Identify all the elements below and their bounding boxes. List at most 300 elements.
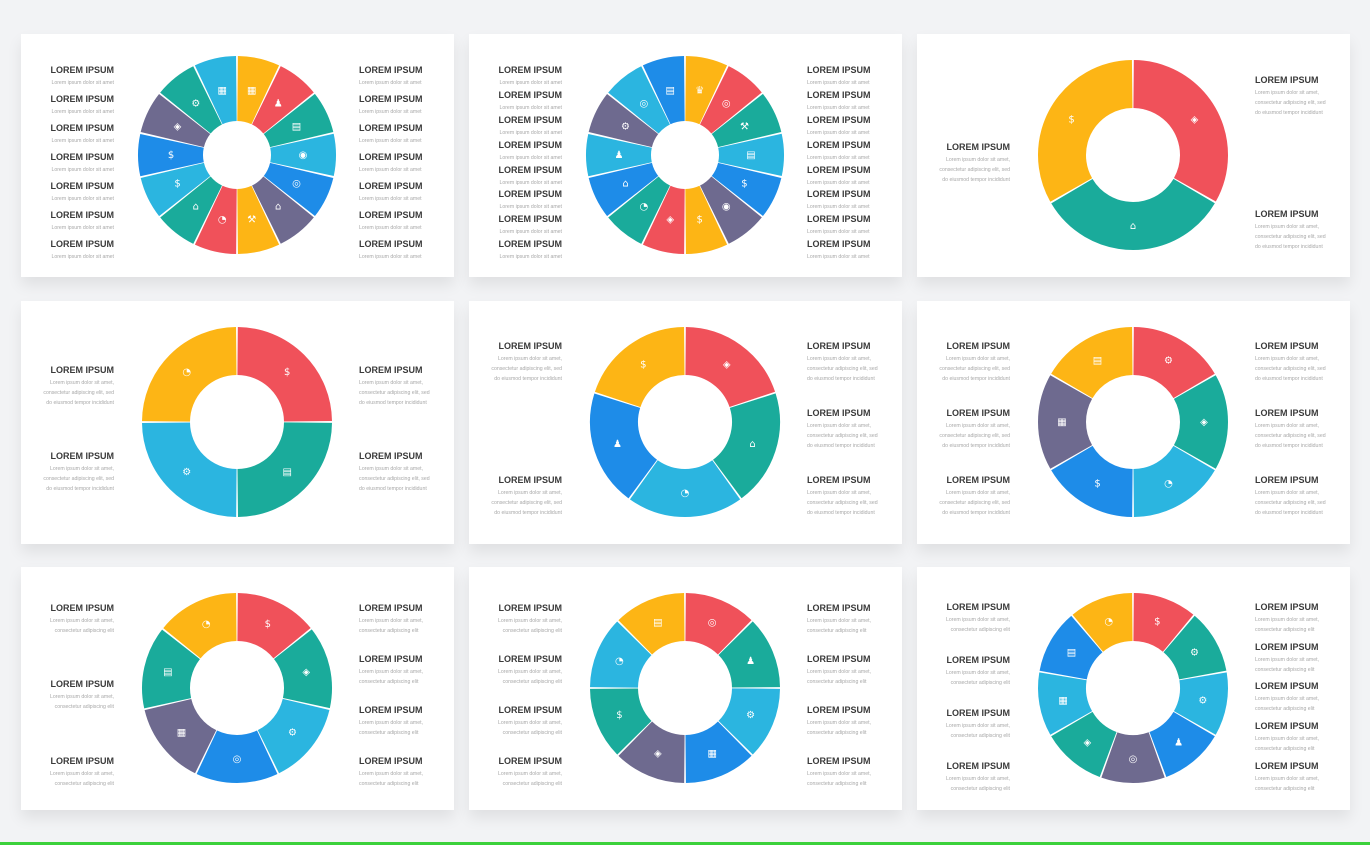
donut chart 5: ◔ [681,488,689,499]
right labels [359,365,430,406]
slide 1: 14-segment pinwheel: Lorem ipsum dolor sit amet [51,109,114,115]
slide 2: 14-segment pinwheel variant: Lorem ipsum dolor sit amet [499,130,562,136]
slide 2: 14-segment pinwheel variant: LOREM IPSUM [498,239,562,249]
right labels [1255,602,1319,633]
right labels: consectetur adipiscing elit [1255,627,1314,633]
left label: Lorem ipsum dolor sit amet, [946,157,1010,163]
donut chart 7: ◎ [233,754,241,765]
left labels: do eiusmod tempor incididunt [494,376,562,382]
slide 6: 6 segments: consectetur adipiscing elit, sed [1255,433,1326,439]
slide 9: 9 segments: Lorem ipsum dolor sit amet, [946,776,1010,782]
donut chart 6: ▤ [1093,356,1102,367]
donut chart 5 [590,327,780,517]
slide 8: 8 segments: LOREM IPSUM [498,705,562,715]
slide 5: 5 segments: consectetur adipiscing elit, sed [491,500,562,506]
slide 2: 14-segment pinwheel variant: LOREM IPSUM [807,115,871,125]
slide 1: 14-segment pinwheel: LOREM IPSUM [50,210,114,220]
left labels [939,341,1010,382]
slide 8: 8 segments: LOREM IPSUM [498,756,562,766]
left labels: Lorem ipsum dolor sit amet, [498,618,562,624]
slide 1: 14-segment pinwheel: LOREM IPSUM [359,123,423,133]
slide 8: 8 segments: consectetur adipiscing elit [807,781,866,787]
slide 7: 7 segments: consectetur adipiscing elit [55,704,114,710]
donut chart 9 [1038,593,1228,783]
donut chart 9: ♟ [1174,737,1183,748]
right labels: do eiusmod tempor incididunt [807,376,875,382]
donut chart 3 [1038,60,1228,250]
slide 6: 6 segments: do eiusmod tempor incididunt [1255,443,1323,449]
left labels: consectetur adipiscing elit, sed [43,390,114,396]
donut chart 8: ◔ [615,656,624,667]
slide 8: 8 segments: Lorem ipsum dolor sit amet, [498,669,562,675]
slide 7: 7 segments: consectetur adipiscing elit [55,781,114,787]
slide 2: 14-segment pinwheel variant: LOREM IPSUM [498,165,562,175]
donut chart 1: ▦ [218,86,227,97]
slide 7: 7 segments: Lorem ipsum dolor sit amet, [359,720,423,726]
slide 2: 14-segment pinwheel variant: LOREM IPSUM [807,239,871,249]
slide 8: 8 segments: consectetur adipiscing elit [807,679,866,685]
slide 2: 14-segment pinwheel variant: Lorem ipsum dolor sit amet [807,130,870,136]
slide 4: 4 segments: LOREM IPSUM [50,451,114,461]
slide 2: 14-segment pinwheel variant: Lorem ipsum dolor sit amet [499,229,562,235]
left labels [498,603,562,634]
donut chart 5: $ [640,360,646,371]
right labels [807,603,871,634]
slide 2: 14-segment pinwheel variant: Lorem ipsum dolor sit amet [807,204,870,210]
slide 8: 8 segments: Lorem ipsum dolor sit amet, [498,771,562,777]
left labels [491,341,562,382]
slide 1: 14-segment pinwheel: LOREM IPSUM [50,152,114,162]
donut chart 2: ◈ [666,214,674,225]
slide 1: 14-segment pinwheel: Lorem ipsum dolor sit amet [51,254,114,260]
slide 7: 7 segments: Lorem ipsum dolor sit amet, [50,694,114,700]
slide 7: 7 segments: consectetur adipiscing elit [359,679,418,685]
slide 5: 5 segments: do eiusmod tempor incididunt [807,443,875,449]
slide 2: 14-segment pinwheel variant: LOREM IPSUM [807,140,871,150]
left labels: LOREM IPSUM [50,65,114,75]
donut chart 8: ◈ [654,749,662,760]
left labels: LOREM IPSUM [498,341,562,351]
slide 3: 3 segments [917,34,1350,277]
right labels: do eiusmod tempor incididunt [359,400,427,406]
right labels: LOREM IPSUM [807,341,871,351]
right labels: consectetur adipiscing elit [807,628,866,634]
slide 4: 4 segments [21,301,454,544]
slide 1: 14-segment pinwheel: Lorem ipsum dolor sit amet [359,138,422,144]
donut chart 6 [1038,327,1228,517]
donut chart 8: ▦ [707,749,717,760]
donut chart 2: $ [697,214,703,225]
right labels: Lorem ipsum dolor sit amet, [1255,90,1319,96]
slide 8: 8 segments: LOREM IPSUM [807,705,871,715]
left labels: do eiusmod tempor incididunt [942,376,1010,382]
slide 9: 9 segments: LOREM IPSUM [946,655,1010,665]
slide 7: 7 segments: Lorem ipsum dolor sit amet, [359,771,423,777]
donut chart 7: ⚙ [288,727,297,738]
donut chart 2: ⌂ [622,179,629,190]
donut chart 1 [138,56,336,254]
slide 7: 7 segments: LOREM IPSUM [50,756,114,766]
slide 6: 6 segments: LOREM IPSUM [1255,408,1319,418]
donut chart 2: ♟ [615,150,623,161]
donut chart 7: ◈ [302,667,310,678]
slide 2: 14-segment pinwheel variant: Lorem ipsum dolor sit amet [807,155,870,161]
slide 4: 4 segments: do eiusmod tempor incididunt [46,486,114,492]
left labels: LOREM IPSUM [946,341,1010,351]
slide 1: 14-segment pinwheel: Lorem ipsum dolor sit amet [359,109,422,115]
slide 9: 9 segments: consectetur adipiscing elit [1255,746,1314,752]
left labels: consectetur adipiscing elit [951,627,1010,633]
slide 3: 3 segments: LOREM IPSUM [1255,209,1319,219]
slide 6: 6 segments: do eiusmod tempor incididunt [942,510,1010,516]
slide 1: 14-segment pinwheel: Lorem ipsum dolor sit amet [359,167,422,173]
donut chart 1: $ [174,179,181,190]
donut chart 2: ▤ [746,150,756,161]
slide 9: 9 segments: LOREM IPSUM [1255,681,1319,691]
donut chart 6: ◔ [1164,478,1173,489]
slide 1: 14-segment pinwheel: LOREM IPSUM [50,123,114,133]
right labels [1255,341,1326,382]
donut chart 1: $ [168,150,174,161]
slide 1: 14-segment pinwheel: LOREM IPSUM [359,152,423,162]
slide 6: 6 segments: consectetur adipiscing elit, sed [939,433,1010,439]
donut chart 5: ◈ [723,360,731,371]
donut chart 7 [142,593,332,783]
donut chart 7: ▦ [177,727,186,738]
donut chart 4: ▤ [282,467,292,478]
right labels: LOREM IPSUM [807,603,871,613]
slide 2: 14-segment pinwheel variant: LOREM IPSUM [498,115,562,125]
slide 6: 6 segments: LOREM IPSUM [1255,475,1319,485]
slide 6: 6 segments: LOREM IPSUM [946,475,1010,485]
slide 5: 5 segments: Lorem ipsum dolor sit amet, [807,423,871,429]
slide 6: 6 segments [917,301,1350,544]
left labels: LOREM IPSUM [50,603,114,613]
left labels: Lorem ipsum dolor sit amet [51,80,114,86]
donut chart 6: ▦ [1057,417,1067,428]
donut chart 9: ▦ [1058,695,1068,706]
slide 1: 14-segment pinwheel: Lorem ipsum dolor sit amet [51,196,114,202]
slide 7: 7 segments: Lorem ipsum dolor sit amet, [50,771,114,777]
slide 9: 9 segments: Lorem ipsum dolor sit amet, [1255,657,1319,663]
slide 6: 6 segments: LOREM IPSUM [946,408,1010,418]
slide 9: 9 segments: LOREM IPSUM [1255,721,1319,731]
slide 5: 5 segments: Lorem ipsum dolor sit amet, [498,490,562,496]
slide 8: 8 segments: Lorem ipsum dolor sit amet, [807,669,871,675]
slide 7: 7 segments: LOREM IPSUM [359,654,423,664]
slide 9: 9 segments: consectetur adipiscing elit [951,733,1010,739]
left labels: consectetur adipiscing elit [503,628,562,634]
slide 7: 7 segments: Lorem ipsum dolor sit amet, [359,669,423,675]
donut chart 7: ◔ [202,619,211,630]
donut chart 2: ◎ [639,98,648,109]
donut chart 1: ♟ [274,98,283,109]
left labels [498,65,562,86]
slide 9: 9 segments: Lorem ipsum dolor sit amet, [1255,776,1319,782]
slide 5: 5 segments: do eiusmod tempor incididunt [494,510,562,516]
right labels: Lorem ipsum dolor sit amet [807,80,870,86]
donut chart 1: ◔ [218,214,227,225]
donut chart 5: ⌂ [749,439,756,450]
slide 1: 14-segment pinwheel [21,34,454,277]
slide 5: 5 segments: Lorem ipsum dolor sit amet, [807,490,871,496]
donut chart 8: ⚙ [746,710,755,721]
slide 5: 5 segments: do eiusmod tempor incididunt [807,510,875,516]
slide 4: 4 segments: do eiusmod tempor incididunt [359,486,427,492]
slide 6: 6 segments: do eiusmod tempor incididunt [942,443,1010,449]
donut chart 1: ◈ [174,121,182,132]
donut chart 9: ▤ [1067,648,1076,658]
slide 7: 7 segments: LOREM IPSUM [359,705,423,715]
slide 2: 14-segment pinwheel variant: LOREM IPSUM [807,165,871,175]
donut chart 2: ⚙ [621,121,630,132]
left labels: Lorem ipsum dolor sit amet, [50,380,114,386]
right labels [1255,75,1326,116]
slide 4: 4 segments: Lorem ipsum dolor sit amet, [50,466,114,472]
left labels [946,602,1010,633]
slide 1: 14-segment pinwheel: LOREM IPSUM [50,239,114,249]
slide 2: 14-segment pinwheel variant: LOREM IPSUM [498,90,562,100]
right labels: consectetur adipiscing elit, sed [1255,100,1326,106]
left labels: LOREM IPSUM [498,603,562,613]
slide 7: 7 segments: consectetur adipiscing elit [359,781,418,787]
right labels: LOREM IPSUM [359,603,423,613]
slide 8: 8 segments: Lorem ipsum dolor sit amet, [807,720,871,726]
slide 2: 14-segment pinwheel variant: LOREM IPSUM [498,214,562,224]
slide 6: 6 segments: Lorem ipsum dolor sit amet, [946,490,1010,496]
left labels: do eiusmod tempor incididunt [46,400,114,406]
slide 2: 14-segment pinwheel variant: Lorem ipsum dolor sit amet [499,105,562,111]
donut chart 9: $ [1154,616,1160,627]
slide 1: 14-segment pinwheel: Lorem ipsum dolor sit amet [359,196,422,202]
donut chart 6: $ [1094,478,1101,489]
slide 4: 4 segments: LOREM IPSUM [359,451,423,461]
right labels: LOREM IPSUM [807,65,871,75]
right labels: LOREM IPSUM [1255,602,1319,612]
slide 6: 6 segments: do eiusmod tempor incididunt [1255,510,1323,516]
slide 1: 14-segment pinwheel: LOREM IPSUM [359,181,423,191]
slide 2: 14-segment pinwheel variant: Lorem ipsum dolor sit amet [499,254,562,260]
left labels: LOREM IPSUM [50,365,114,375]
left labels: LOREM IPSUM [498,65,562,75]
slide 6: 6 segments: consectetur adipiscing elit, sed [939,500,1010,506]
slide 3: 3 segments: Lorem ipsum dolor sit amet, [1255,224,1319,230]
slide 1: 14-segment pinwheel: Lorem ipsum dolor sit amet [51,167,114,173]
slide 8: 8 segments: LOREM IPSUM [807,756,871,766]
donut chart 1: ⚒ [247,214,256,225]
left labels: Lorem ipsum dolor sit amet [499,80,562,86]
right labels: Lorem ipsum dolor sit amet, [807,356,871,362]
slide 9: 9 segments: Lorem ipsum dolor sit amet, [1255,696,1319,702]
donut chart 8: $ [616,710,623,721]
slide 9: 9 segments: consectetur adipiscing elit [951,786,1010,792]
donut chart 9: ⚙ [1198,695,1207,706]
donut chart 2: ▤ [666,86,675,97]
right labels: Lorem ipsum dolor sit amet [359,80,422,86]
right labels: consectetur adipiscing elit, sed [359,390,430,396]
donut chart 9: ⚙ [1190,648,1199,658]
donut chart 3: ⌂ [1130,221,1136,232]
left labels: consectetur adipiscing elit [55,628,114,634]
donut chart 2: ♛ [695,86,704,97]
slide 5: 5 segments: LOREM IPSUM [498,475,562,485]
slide 9: 9 segments: LOREM IPSUM [946,708,1010,718]
left labels [43,365,114,406]
slide 9: 9 segments: LOREM IPSUM [1255,642,1319,652]
slide 6: 6 segments: consectetur adipiscing elit, sed [1255,500,1326,506]
right labels: consectetur adipiscing elit, sed [807,366,878,372]
left labels [50,65,114,86]
slide 8: 8 segments [469,567,902,810]
slide 2: 14-segment pinwheel variant: LOREM IPSUM [807,90,871,100]
right labels [807,65,871,86]
left labels: Lorem ipsum dolor sit amet, [498,356,562,362]
right labels: Lorem ipsum dolor sit amet, [807,618,871,624]
slide 3: 3 segments: do eiusmod tempor incididunt [1255,244,1323,250]
slide 5: 5 segments: LOREM IPSUM [807,475,871,485]
slide 7: 7 segments [21,567,454,810]
slide 6: 6 segments: Lorem ipsum dolor sit amet, [1255,423,1319,429]
slide 8: 8 segments: consectetur adipiscing elit [503,679,562,685]
slide 9: 9 segments: consectetur adipiscing elit [1255,667,1314,673]
donut chart 1: ⌂ [275,202,281,213]
donut chart 1: ⚙ [191,98,200,109]
slide 9: 9 segments: consectetur adipiscing elit [1255,786,1314,792]
bottom accent line [0,842,1370,845]
donut chart 2: ◔ [639,202,648,213]
slide 2: 14-segment pinwheel variant: LOREM IPSUM [807,189,871,199]
slide 4: 4 segments: consectetur adipiscing elit, sed [43,476,114,482]
slide 9: 9 segments [917,567,1350,810]
slide 5: 5 segments [469,301,902,544]
slide 5: 5 segments: consectetur adipiscing elit, sed [807,433,878,439]
slide 2: 14-segment pinwheel variant: LOREM IPSUM [498,140,562,150]
slide 9: 9 segments: consectetur adipiscing elit [951,680,1010,686]
slide 5: 5 segments: LOREM IPSUM [807,408,871,418]
right labels: Lorem ipsum dolor sit amet, [1255,617,1319,623]
donut chart 7: ▤ [163,667,173,678]
slide 6: 6 segments: Lorem ipsum dolor sit amet, [1255,490,1319,496]
slide 8: 8 segments: consectetur adipiscing elit [503,730,562,736]
donut chart 9: ◎ [1129,754,1137,765]
slide 9: 9 segments: consectetur adipiscing elit [1255,706,1314,712]
slide 4: 4 segments: Lorem ipsum dolor sit amet, [359,466,423,472]
right labels: Lorem ipsum dolor sit amet, [359,380,423,386]
right labels [359,65,423,86]
slide 9: 9 segments: Lorem ipsum dolor sit amet, [946,723,1010,729]
slide 5: 5 segments: consectetur adipiscing elit, sed [807,500,878,506]
right labels: Lorem ipsum dolor sit amet, [359,618,423,624]
donut chart 4: $ [284,367,290,378]
slide 8: 8 segments: LOREM IPSUM [807,654,871,664]
donut chart 1: ▤ [292,121,301,132]
slide 8: 8 segments: consectetur adipiscing elit [503,781,562,787]
donut chart 8: ▤ [653,617,663,628]
slide 2: 14-segment pinwheel variant: Lorem ipsum dolor sit amet [807,180,870,186]
donut chart 8: ◎ [708,617,717,628]
left label: consectetur adipiscing elit, sed [939,167,1010,173]
left label [939,142,1010,183]
donut chart 2: $ [741,179,748,190]
slide 2: 14-segment pinwheel variant: Lorem ipsum dolor sit amet [807,229,870,235]
donut chart 2: ◉ [722,202,731,213]
left label: do eiusmod tempor incididunt [942,177,1010,183]
slide 2: 14-segment pinwheel variant: Lorem ipsum dolor sit amet [499,155,562,161]
slide 2: 14-segment pinwheel variant: Lorem ipsum dolor sit amet [499,204,562,210]
donut chart 1: ▦ [247,86,256,97]
right labels: LOREM IPSUM [1255,75,1319,85]
left labels: Lorem ipsum dolor sit amet, [50,618,114,624]
left labels: LOREM IPSUM [946,602,1010,612]
right labels: LOREM IPSUM [1255,341,1319,351]
donut chart 6: ⚙ [1164,356,1173,367]
slide 8: 8 segments: LOREM IPSUM [498,654,562,664]
slide 7: 7 segments: LOREM IPSUM [359,756,423,766]
donut chart 7: $ [265,619,271,630]
slide 2: 14-segment pinwheel variant: LOREM IPSUM [807,214,871,224]
slide 1: 14-segment pinwheel: Lorem ipsum dolor sit amet [359,254,422,260]
slide 1: 14-segment pinwheel: Lorem ipsum dolor sit amet [51,225,114,231]
left labels: consectetur adipiscing elit, sed [939,366,1010,372]
donut chart 1: ◎ [292,179,301,190]
slide 7: 7 segments: consectetur adipiscing elit [359,730,418,736]
donut chart 2: ◎ [722,98,731,109]
donut chart 1: ⌂ [193,202,199,213]
slide 2: 14-segment pinwheel variant: LOREM IPSUM [498,189,562,199]
slide 1: 14-segment pinwheel: Lorem ipsum dolor sit amet [359,225,422,231]
left labels: consectetur adipiscing elit, sed [491,366,562,372]
slide 1: 14-segment pinwheel: LOREM IPSUM [359,210,423,220]
slide 9: 9 segments: Lorem ipsum dolor sit amet, [1255,736,1319,742]
donut chart 1: ◉ [299,150,307,161]
slide 4: 4 segments: consectetur adipiscing elit, sed [359,476,430,482]
slide 2: 14-segment pinwheel variant: Lorem ipsum dolor sit amet [499,180,562,186]
donut chart 9: ◈ [1084,737,1092,748]
donut chart 4: ⚙ [182,467,191,478]
right labels: consectetur adipiscing elit, sed [1255,366,1326,372]
left label: LOREM IPSUM [946,142,1010,152]
slide 2: 14-segment pinwheel variant: Lorem ipsum dolor sit amet [807,254,870,260]
right labels: do eiusmod tempor incididunt [1255,110,1323,116]
slide 1: 14-segment pinwheel: LOREM IPSUM [359,239,423,249]
right labels: consectetur adipiscing elit [359,628,418,634]
donut chart 2 [586,56,784,254]
slide 7: 7 segments: LOREM IPSUM [50,679,114,689]
donut chart 6: ◈ [1200,417,1208,428]
slide 9: 9 segments: Lorem ipsum dolor sit amet, [946,670,1010,676]
donut chart 3: $ [1068,114,1075,126]
donut chart 8 [590,593,780,783]
donut chart 4: ◔ [182,367,191,378]
slide 2: 14-segment pinwheel variant [469,34,902,277]
slide 8: 8 segments: Lorem ipsum dolor sit amet, [498,720,562,726]
donut chart 2: ⚒ [740,121,749,132]
slide 8: 8 segments: consectetur adipiscing elit [807,730,866,736]
right labels: Lorem ipsum dolor sit amet, [1255,356,1319,362]
slide 1: 14-segment pinwheel: LOREM IPSUM [359,94,423,104]
right labels [807,341,878,382]
left labels [50,603,114,634]
slide 3: 3 segments: consectetur adipiscing elit, sed [1255,234,1326,240]
slide 6: 6 segments: Lorem ipsum dolor sit amet, [946,423,1010,429]
donut chart 8: ♟ [746,656,755,667]
donut chart 4 [142,327,332,517]
slide 1: 14-segment pinwheel: LOREM IPSUM [50,181,114,191]
donut chart 3: ◈ [1191,114,1199,126]
slide 2: 14-segment pinwheel variant: Lorem ipsum dolor sit amet [807,105,870,111]
left labels: Lorem ipsum dolor sit amet, [946,356,1010,362]
donut chart 5: ♟ [613,439,622,450]
